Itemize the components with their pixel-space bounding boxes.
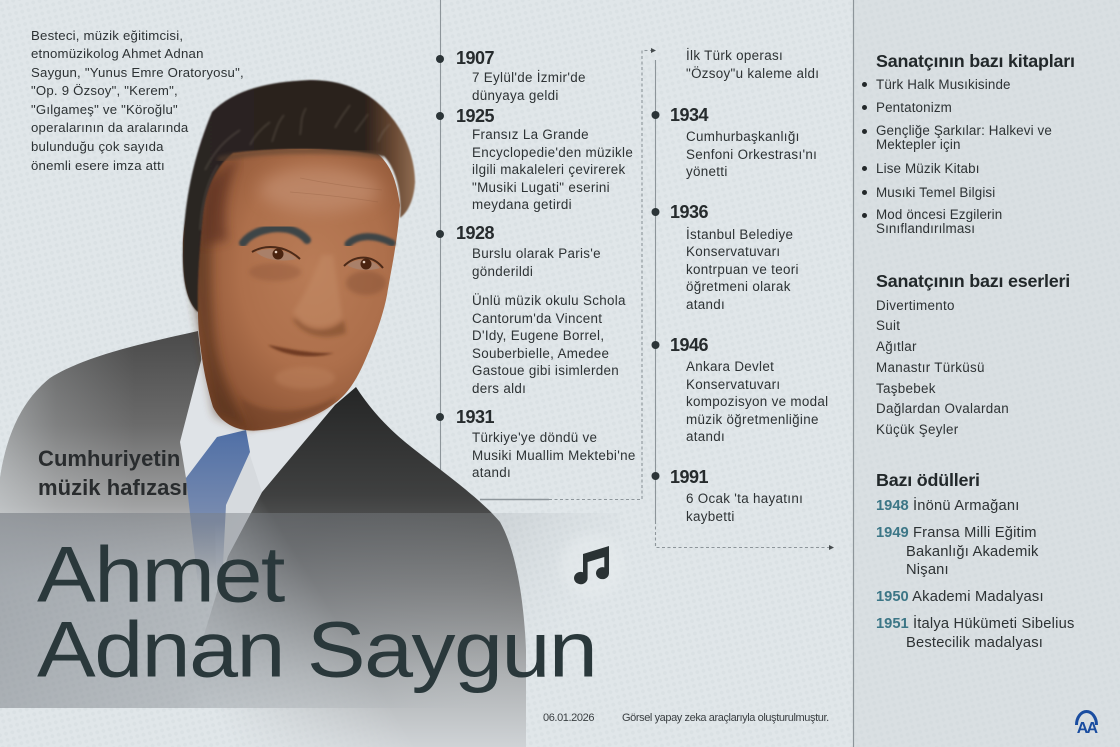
1928 entry: ders aldı	[472, 380, 526, 396]
1936 entry: öğretmeni olarak	[686, 279, 791, 294]
1936 entry: Konservatuvarı	[686, 244, 780, 259]
award 1949: Nişanı	[906, 562, 949, 578]
intro text: önemli esere imza attı	[31, 158, 165, 173]
1928 entry: Ünlü müzik okulu Schola	[472, 293, 626, 308]
1934 entry	[670, 105, 817, 179]
title line 2: Adnan Saygun	[37, 604, 596, 694]
hair	[183, 80, 415, 312]
timeline column 2	[670, 48, 828, 524]
eyebrows	[243, 228, 392, 244]
1991 entry: 6 Ocak 'ta hayatını	[686, 491, 803, 506]
1925 entry	[456, 106, 633, 212]
award 1949	[876, 525, 1039, 578]
books list: Türk Halk Musıkisinde	[876, 76, 1011, 92]
1934 entry: Cumhurbaşkanlığı	[686, 129, 800, 144]
books list: Mektepler için	[876, 137, 961, 152]
1946 entry: atandı	[686, 429, 725, 444]
books list: Musıki Temel Bilgisi	[876, 184, 995, 200]
1928 entry: D'Idy, Eugene Borrel,	[472, 328, 604, 343]
books list: Pentatonizm	[876, 100, 952, 114]
intro text: operalarının da aralarında	[31, 120, 188, 135]
1936 entry	[670, 202, 799, 312]
works list: Divertimento	[876, 298, 955, 312]
1934 entry: yönetti	[686, 164, 728, 179]
panel: works	[876, 271, 1070, 437]
award 1951	[876, 615, 1075, 651]
AI disclaimer: Görsel yapay zeka araçlarıyla oluşturulmuştur.	[622, 712, 829, 724]
1931 entry: Türkiye'ye döndü ve	[472, 430, 597, 445]
logo: AA: AA	[1077, 720, 1098, 737]
intro text: "Op. 9 Özsoy", "Kerem",	[31, 83, 178, 98]
books list: Gençliğe Şarkılar: Halkevi ve	[876, 122, 1052, 138]
books list: Mod öncesi Ezgilerin	[876, 206, 1002, 222]
books list	[862, 76, 1052, 236]
1925 entry: "Musiki Lugati" eserini	[472, 180, 610, 194]
subtitle: Cumhuriyetin	[38, 446, 180, 471]
works list: Suit	[876, 318, 900, 333]
1931 entry: Musiki Muallim Mektebi'ne	[472, 448, 636, 462]
1925 entry: Encyclopedie'den müzikle	[472, 144, 633, 160]
shirt front	[214, 436, 262, 575]
award 1949: 1949 Fransa Milli Eğitim	[876, 525, 1037, 541]
1934 entry: 1934	[670, 105, 708, 125]
timeline column 1	[456, 48, 636, 480]
1991 entry: 1991	[670, 467, 708, 487]
hairline transition	[218, 151, 384, 160]
1991 entry	[670, 467, 803, 524]
1931 continued: "Özsoy"u kaleme aldı	[686, 66, 819, 80]
works list: Manastır Türküsü	[876, 360, 985, 375]
1931 continued: İlk Türk operası	[686, 48, 783, 63]
facial shadows and modelling	[188, 155, 386, 430]
1928 entry: Cantorum'da Vincent	[472, 310, 602, 326]
1946 entry: Konservatuvarı	[686, 376, 780, 392]
heading: works: Sanatçının bazı eserleri	[876, 271, 1070, 291]
subtitle: müzik hafızası	[38, 475, 188, 500]
1907 entry: 1907	[456, 48, 494, 68]
1931 entry: atandı	[472, 465, 511, 480]
tie	[186, 430, 250, 585]
1934 entry: Senfoni Orkestrası'nı	[686, 146, 817, 162]
1936 entry: atandı	[686, 296, 725, 312]
intro text: Saygun, "Yunus Emre Oratoryosu",	[31, 65, 244, 80]
1925 entry: 1925	[456, 106, 494, 126]
1928 entry: Gastoue gibi isimlerden	[472, 363, 619, 378]
1907 entry: 7 Eylül'de İzmir'de	[472, 70, 586, 85]
subtitle	[38, 446, 188, 500]
1936 entry: 1936	[670, 202, 708, 222]
1991 entry: kaybetti	[686, 508, 735, 524]
portrait of Ahmet Adnan Saygun	[0, 79, 526, 747]
mouth	[268, 345, 334, 356]
intro text: bulunduğu çok sayıda	[31, 139, 164, 154]
intro text: "Gılgameş" ve "Köroğlu"	[31, 102, 178, 117]
works list: Taşbebek	[876, 381, 936, 396]
panel: awards	[876, 470, 1075, 651]
works list: Ağıtlar	[876, 339, 917, 354]
1925 entry: ilgili makaleleri çevirerek	[472, 162, 625, 177]
1925 entry: Fransız La Grande	[472, 127, 589, 142]
1925 entry: meydana getirdi	[472, 197, 572, 212]
heading: books: Sanatçının bazı kitapları	[876, 51, 1075, 71]
main title	[37, 530, 596, 694]
1928 entry: Souberbielle, Amedee	[472, 346, 609, 360]
1928 entry	[456, 223, 626, 396]
1931 entry	[456, 407, 636, 480]
neck and face	[183, 137, 400, 431]
suit right body	[170, 387, 526, 747]
award 1951: 1951 İtalya Hükümeti Sibelius	[876, 616, 1075, 632]
1907 entry	[456, 48, 586, 103]
1936 entry: İstanbul Belediye	[686, 226, 793, 242]
books list: Lise Müzik Kitabı	[876, 160, 980, 176]
intro text	[31, 28, 244, 173]
heading: awards: Bazı ödülleri	[876, 470, 980, 490]
books list: Sınıflandırılması	[876, 221, 975, 236]
award 1949: Bakanlığı Akademik	[906, 544, 1039, 560]
hair highlights	[200, 105, 390, 230]
title line 1: Ahmet	[37, 530, 284, 619]
1931 continued	[686, 48, 819, 81]
1946 entry	[670, 335, 828, 444]
date: 06.01.2026	[543, 712, 594, 724]
1931 entry: 1931	[456, 407, 494, 427]
1936 entry: kontrpuan ve teori	[686, 262, 799, 276]
panel: books	[862, 51, 1075, 236]
1946 entry: 1946	[670, 335, 708, 355]
1907 entry: dünyaya geldi	[472, 88, 559, 102]
intro text: etnomüzikolog Ahmet Adnan	[31, 46, 204, 61]
1946 entry: kompozisyon ve modal	[686, 394, 828, 409]
shirt collar	[180, 357, 335, 492]
works list: Dağlardan Ovalardan	[876, 401, 1009, 416]
1928 entry: Burslu olarak Paris'e	[472, 246, 601, 261]
intro text: Besteci, müzik eğitimcisi,	[31, 28, 183, 42]
1946 entry: Ankara Devlet	[686, 359, 774, 374]
works list: Küçük Şeyler	[876, 422, 958, 437]
eyes	[252, 247, 383, 270]
suit left shoulder	[0, 331, 225, 600]
1946 entry: müzik öğretmenliğine	[686, 412, 819, 426]
award 1948: 1948 İnönü Armağanı	[876, 498, 1019, 514]
award 1950: 1950 Akademi Madalyası	[876, 589, 1044, 605]
works list	[876, 298, 1009, 437]
1928 entry: 1928	[456, 223, 494, 243]
award 1951: Bestecilik madalyası	[906, 635, 1043, 651]
1928 entry: gönderildi	[472, 264, 533, 278]
